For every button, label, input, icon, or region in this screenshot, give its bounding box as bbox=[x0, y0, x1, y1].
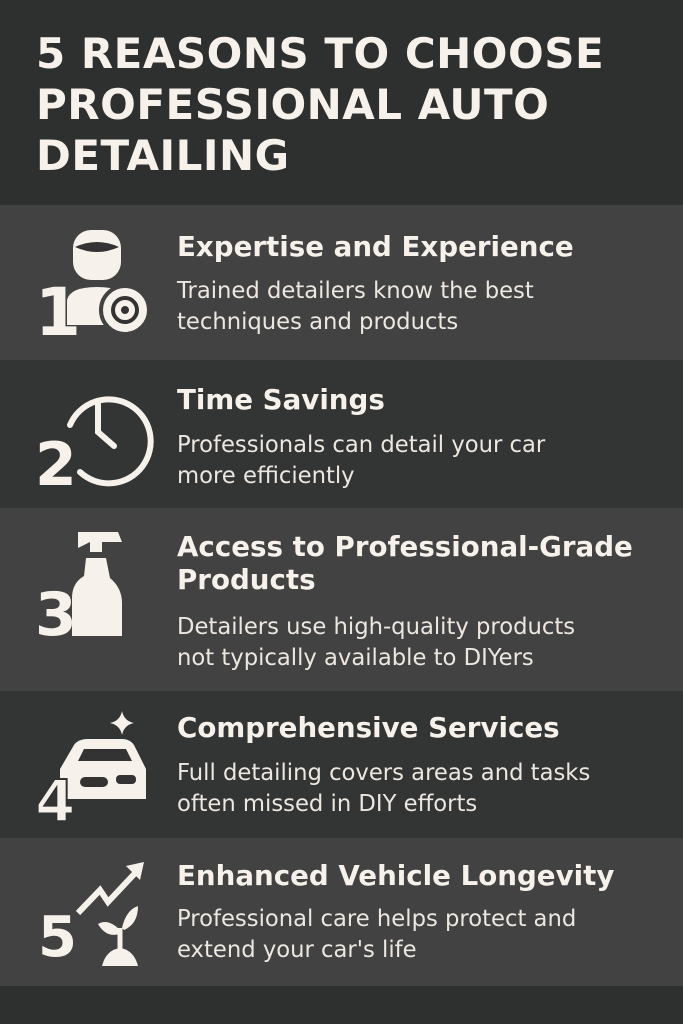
panel: comprehensive bbox=[0, 691, 683, 838]
text: Professionals can detail your car bbox=[177, 432, 545, 458]
text bbox=[176, 278, 534, 335]
title: 5 REASONS TO CHOOSE bbox=[36, 29, 604, 78]
heading: Access to Professional-Grade bbox=[177, 530, 633, 563]
icon: 2 clock bbox=[35, 396, 154, 490]
icon: 3 spray bottle: 3 bbox=[35, 580, 77, 648]
title bbox=[36, 29, 604, 180]
text: extend your car's life bbox=[177, 937, 417, 963]
text: not typically available to DIYers bbox=[177, 645, 534, 671]
text: more efficiently bbox=[177, 463, 355, 489]
heading: Time Savings bbox=[177, 383, 385, 416]
icon: 5 growth arrow and plant: 5 bbox=[38, 905, 77, 970]
heading: Products bbox=[177, 563, 316, 596]
icon: 5 growth arrow and plant bbox=[38, 862, 144, 970]
heading bbox=[177, 530, 633, 596]
title: DETAILING bbox=[36, 131, 290, 180]
panel: expertise bbox=[0, 205, 683, 360]
text: Detailers use high-quality products bbox=[177, 614, 575, 640]
panel: time bbox=[0, 360, 683, 508]
icon: 4 car with sparkle bbox=[35, 711, 146, 824]
text: Trained detailers know the best bbox=[177, 278, 534, 304]
heading: Comprehensive Services bbox=[177, 711, 560, 744]
text: Professional care helps protect and bbox=[177, 906, 576, 932]
text bbox=[177, 432, 546, 489]
text bbox=[177, 760, 590, 817]
panel: products bbox=[0, 508, 683, 691]
icon: 1 worker with gear bbox=[35, 230, 147, 345]
text: techniques and products bbox=[177, 309, 458, 335]
panel: longevity bbox=[0, 838, 683, 986]
text: Full detailing covers areas and tasks bbox=[177, 760, 590, 786]
heading: Expertise and Experience bbox=[177, 230, 574, 263]
heading: Enhanced Vehicle Longevity bbox=[177, 859, 614, 892]
title: PROFESSIONAL AUTO bbox=[36, 80, 549, 129]
text: often missed in DIY efforts bbox=[177, 791, 477, 817]
text bbox=[177, 906, 576, 963]
text bbox=[177, 614, 575, 671]
icon: 3 spray bottle bbox=[35, 532, 122, 648]
